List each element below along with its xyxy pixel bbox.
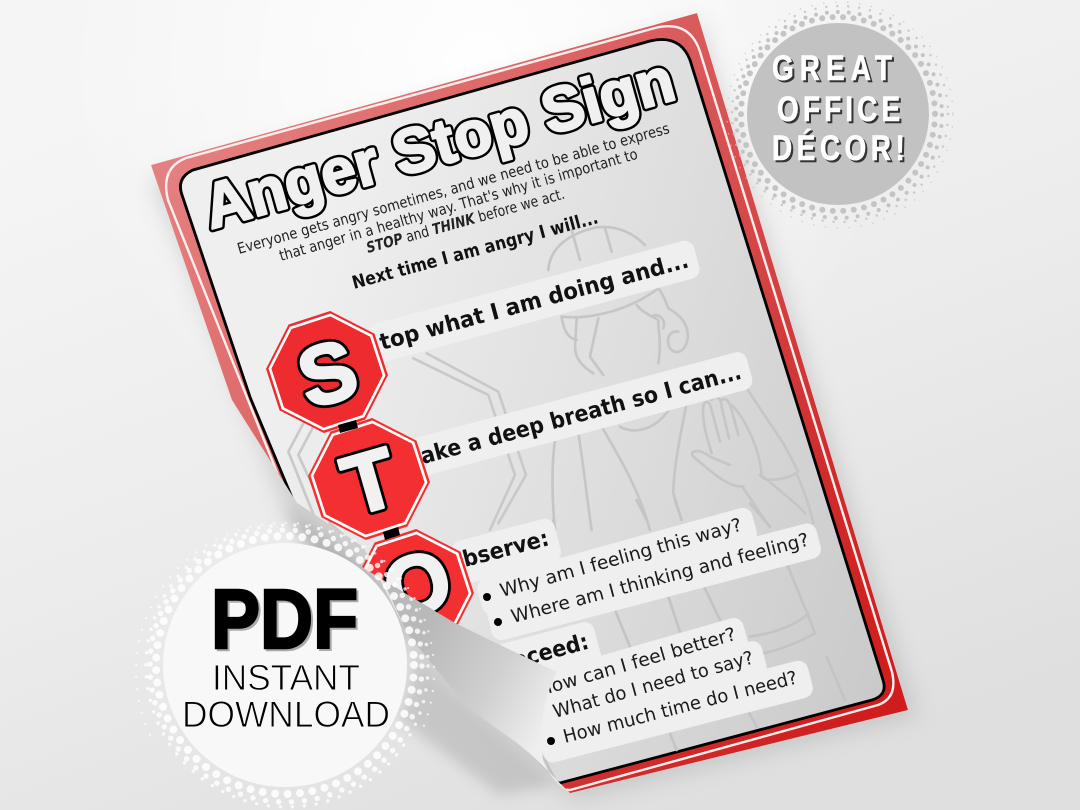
watermark: construction worker bbox=[548, 227, 813, 530]
page curl flap bbox=[383, 580, 570, 793]
dot halo: PDF badge bbox=[136, 523, 434, 807]
stop sign O bbox=[362, 529, 474, 624]
proceed questions: How much time do I need? bbox=[561, 668, 800, 748]
proceed questions: How can I feel better? bbox=[536, 624, 738, 701]
observe questions bbox=[475, 506, 823, 642]
title: Anger Stop Sign bbox=[196, 45, 682, 242]
pill: proceed heading bbox=[489, 620, 603, 690]
decor: DÉCOR! bbox=[772, 128, 905, 168]
curl shadow bbox=[400, 660, 555, 795]
great: GREAT bbox=[772, 48, 893, 88]
stop sign S: S bbox=[288, 320, 367, 426]
intro paragraph: that anger in a healthy way. That's why it is important to bbox=[277, 145, 640, 265]
step O: observe bbox=[362, 508, 821, 640]
pill: observe heading: bserve: bbox=[460, 526, 552, 573]
observe questions: Why am I feeling this way? bbox=[498, 515, 744, 602]
pill: proceed heading: roceed: bbox=[500, 629, 592, 677]
stop sign O: O bbox=[373, 530, 462, 638]
title: Anger Stop Sign bbox=[196, 45, 682, 242]
pill: observe heading bbox=[450, 517, 563, 586]
instant label: INSTANT bbox=[212, 657, 360, 698]
stop sign T: T bbox=[332, 429, 407, 533]
pill: breath text: ake a deep breath so I can... bbox=[418, 359, 744, 470]
watermark: worker lower body bbox=[543, 500, 845, 777]
poster sheet bbox=[151, 13, 908, 800]
step T: take a breath bbox=[297, 350, 755, 551]
stop sign O: O bbox=[373, 530, 462, 638]
white inner frame line bbox=[166, 26, 893, 790]
stop sign S bbox=[255, 300, 399, 444]
red frame bbox=[151, 13, 908, 800]
pill: stop text: top what I am doing and... bbox=[377, 248, 692, 356]
proceed questions bbox=[515, 616, 815, 764]
download label: DOWNLOAD bbox=[182, 694, 390, 735]
step P: proceed bbox=[489, 616, 815, 764]
badge: PDF instant download bbox=[163, 543, 407, 787]
watermark: stop sign outline bbox=[288, 353, 526, 573]
subheading: Next time I am angry I will... bbox=[350, 207, 601, 294]
observe questions: Where am I thinking and feeling? bbox=[509, 530, 811, 628]
office: OFFICE bbox=[777, 89, 900, 129]
stop sign S: S bbox=[288, 320, 367, 426]
connector bbox=[383, 527, 400, 540]
PDF label: PDF bbox=[211, 572, 358, 666]
step S: stop bbox=[255, 238, 702, 444]
grey panel bbox=[180, 40, 884, 783]
badge: great office decor bbox=[747, 23, 929, 205]
fold shadow bbox=[285, 505, 405, 640]
dot halo: office decor badge bbox=[727, 2, 953, 228]
intro paragraph: STOP and THINK before we act. bbox=[364, 185, 567, 257]
proceed questions: What do I need to say? bbox=[551, 648, 756, 723]
stop sign T bbox=[297, 407, 441, 551]
connector bbox=[338, 420, 358, 433]
intro paragraph: Everyone gets angry sometimes, and we need to be able to express bbox=[235, 119, 672, 258]
stop sign T: T bbox=[332, 429, 407, 533]
page shadow bbox=[150, 22, 918, 800]
